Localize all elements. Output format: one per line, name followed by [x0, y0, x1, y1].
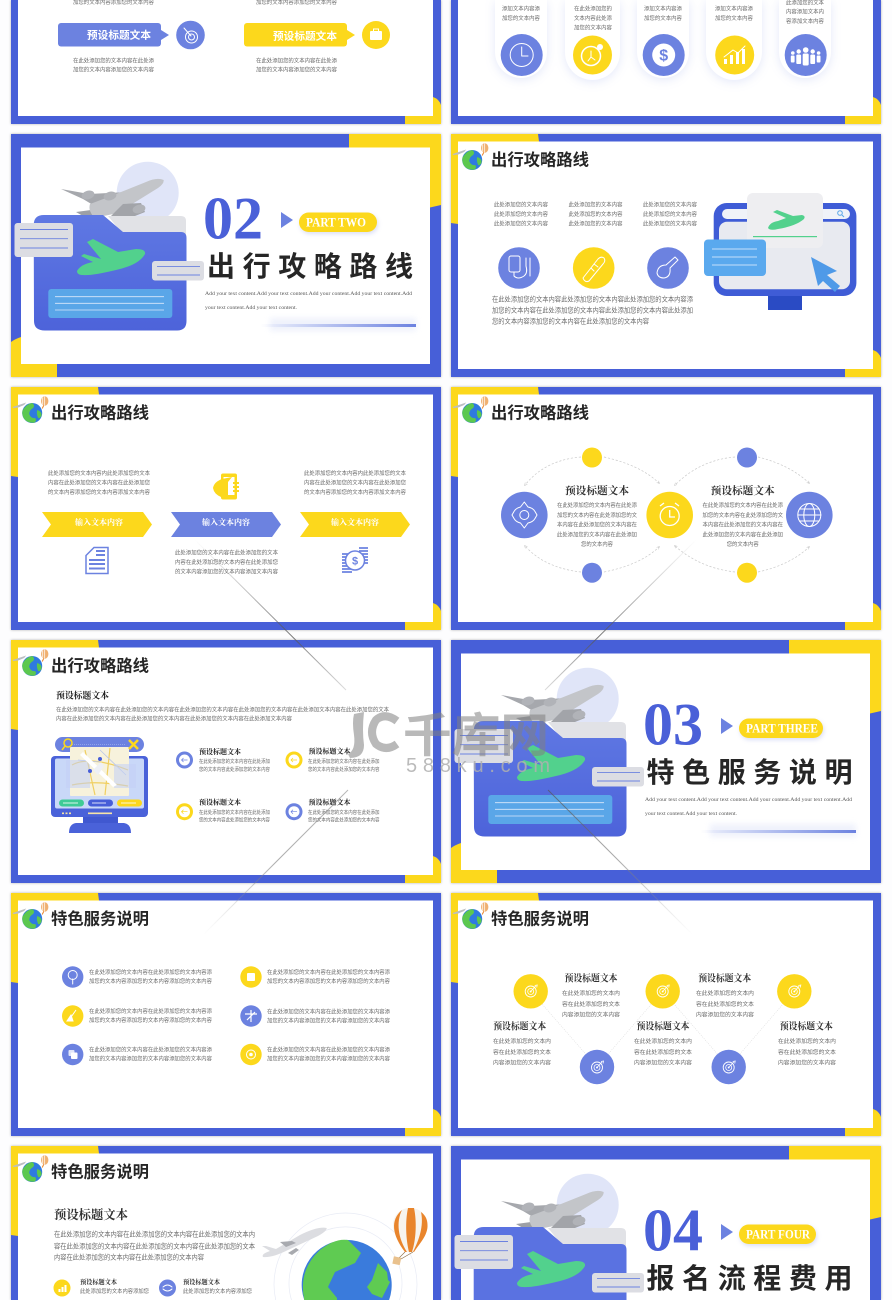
- arrow banner 2: [171, 512, 281, 537]
- arrow banner 3: [300, 512, 410, 537]
- center text: 此处添加您的文本内容在此处添加您的文本: [175, 548, 278, 556]
- lower text 3: 容在此处添加您的文本: [778, 1048, 837, 1056]
- text columns: 此处添加您的文本内容: [494, 201, 548, 209]
- text row 3: [89, 1046, 390, 1063]
- text columns: [494, 201, 697, 228]
- pill: part four: [739, 1224, 816, 1244]
- text columns: 此处添加您的文本内容: [494, 220, 548, 228]
- heading: 出行攻略路线: [51, 656, 149, 676]
- frame: [451, 1146, 881, 1300]
- text columns: 此处添加您的文本内容: [643, 220, 697, 228]
- lower text 1: [493, 1020, 552, 1066]
- illustration: folder and airplane: [14, 162, 204, 330]
- lower text 2: [634, 1020, 693, 1066]
- item: yellow: 此处添加您的文本内容添加您: [80, 1287, 149, 1295]
- item 3: 在此处添加您的文本内容在此处添加: [199, 809, 270, 816]
- text block: description: 您的文本内容添加您的文本内容在此处添加您的文本内容: [492, 316, 649, 326]
- panel: arrows slide: [11, 387, 441, 630]
- text block: descriptions: 在此处添加您的文本内容在此处添: [256, 56, 337, 64]
- text columns: 此处添加您的文本内容: [568, 220, 623, 228]
- pill: part three: [739, 718, 823, 738]
- watermark diagonal lines: [195, 540, 696, 935]
- right text: 加您的文本内容在此处添加您的文: [702, 511, 783, 519]
- center text: [175, 548, 278, 576]
- lower text 1: 预设标题文本: [493, 1020, 547, 1032]
- top text 2: 在此处添加您的文本内: [696, 989, 754, 997]
- icon: globe: [13, 1155, 48, 1186]
- orbit rings: [274, 1213, 417, 1300]
- heading: 出行攻略路线: [491, 150, 589, 170]
- left text: [48, 469, 150, 496]
- text block: description: 加您的文本内容在此处添加您的文本内容此处添加您的文本内容此处添加: [492, 306, 693, 314]
- top text 2: 预设标题文本: [698, 972, 752, 984]
- text block: english: Add your text content.Add your text content.Add your content.Add your text content.Add: [645, 797, 852, 803]
- lower text 3: 在此处添加您的文本内: [778, 1037, 836, 1045]
- label: blue pill: [58, 23, 169, 46]
- icon: dollar: $: [659, 48, 668, 64]
- top text 1: 预设标题文本: [564, 972, 618, 984]
- icon: infusion: [498, 247, 540, 289]
- panel: globe slide: [11, 1146, 441, 1300]
- frame: [451, 0, 881, 124]
- illustration: folder and airplane: [454, 668, 644, 836]
- left text: 此处添加您的文本内容内此处添加您的文本: [48, 469, 150, 477]
- icon: growth chart: [715, 36, 754, 74]
- left heading: 预设标题文本: [565, 484, 630, 497]
- icon: globe: [453, 396, 488, 427]
- text block: 内容在此处添加您的文本内容在此处添加您的文本内容在此处添加您的文本内容在此处添加文本内容: [56, 714, 292, 722]
- text row 3: 加您的文本内容添加您的文本内容添加您的文本内容: [267, 1055, 390, 1063]
- target nodes: [514, 974, 812, 1084]
- item: blue: [159, 1277, 252, 1296]
- text block: [54, 1230, 255, 1262]
- icon: coins: $: [352, 556, 358, 568]
- watermark url: 588ku.com: [406, 755, 550, 777]
- lower text 2: 在此处添加您的文本内: [634, 1037, 692, 1045]
- small dots: [582, 448, 757, 583]
- item 3: [176, 798, 270, 824]
- panel: section 02: [11, 134, 441, 377]
- left text: 在此处添加您的文本内容在此处添: [557, 501, 637, 509]
- lower text 3: [778, 1020, 837, 1066]
- text block: description: 在此处添加您的文本内容此处添加您的文本内容此处添加您的文本内容添: [492, 294, 693, 304]
- text block: 在此处添加您的文本内容在此处添加您的文本内容在此处添加您的文本内: [54, 1230, 255, 1238]
- lower text 3: 预设标题文本: [780, 1020, 833, 1032]
- text block: english: [645, 797, 852, 817]
- capsule text: 添加文本内容添: [715, 4, 753, 12]
- top text 1: 内容添加您的文本内容: [562, 1010, 621, 1018]
- icon row 2: [62, 1005, 262, 1027]
- top text 2: 容在此处添加您的文本: [696, 1000, 755, 1008]
- capsule text: 加您的文本内容: [644, 14, 682, 22]
- text block: description: [492, 294, 693, 326]
- text columns: 此处添加您的文本内容: [568, 201, 623, 209]
- top text 1: 在此处添加您的文本内: [562, 989, 620, 997]
- capsule text: 加您的文本内容: [574, 24, 612, 32]
- text row 1: 在此处添加您的文本内容在此处添加您的文本内容添: [267, 968, 390, 976]
- right text: 的文本内容添加您的文本内容添加文本内容: [304, 488, 406, 496]
- icon: globe: [13, 396, 48, 427]
- icon row 3: [62, 1044, 262, 1065]
- icon: compass: [501, 492, 548, 538]
- text row 2: 在此处添加您的文本内容在此处添加您的文本内容添: [267, 1008, 390, 1016]
- icon: triangle: [721, 718, 733, 734]
- center text: 的文本内容添加您的文本内容添加文本内容: [175, 568, 278, 576]
- text columns: 此处添加您的文本内容: [494, 210, 548, 218]
- lower text 2: 内容添加您的文本内容: [634, 1058, 693, 1066]
- label: yellow pill: [244, 23, 355, 46]
- text block: descriptions: 加您的文本内容添加您的文本内容: [256, 66, 337, 74]
- lower text 1: 在此处添加您的文本内: [493, 1037, 551, 1045]
- lower text 3: 内容添加您的文本内容: [778, 1058, 837, 1066]
- section title: 出行攻略路线: [207, 251, 413, 282]
- frame: [451, 387, 881, 630]
- top text 2: 内容添加您的文本内容: [696, 1010, 755, 1018]
- text block: [56, 705, 389, 722]
- frame: [11, 134, 441, 377]
- right text: 您的文本内容: [727, 540, 759, 548]
- icon: clock: [501, 34, 543, 76]
- item 4: 在此处添加您的文本内容在此处添加: [308, 809, 380, 816]
- right text: 在此处添加您的文本内容在此处添: [702, 501, 783, 509]
- icon: people: [785, 34, 827, 76]
- icon: briefcase: [362, 21, 390, 49]
- arrow banner 1: [42, 512, 152, 537]
- capsule text: 文本内容此处添: [574, 14, 612, 22]
- panel: zigzag slide: [451, 893, 881, 1136]
- right text: 此处添加您的文本内容内此处添加您的文本: [304, 469, 406, 477]
- right text: 本内容在此处添加您的文本内容在: [702, 521, 783, 529]
- heading: 特色服务说明: [51, 910, 149, 928]
- heading: 特色服务说明: [51, 1162, 149, 1182]
- text block: descriptions: 加您的文本内容添加您的文本内容: [73, 66, 154, 74]
- illustration: balloon: [392, 1208, 428, 1265]
- heading: 出行攻略路线: [491, 404, 589, 422]
- item: yellow: [54, 1277, 149, 1296]
- subheading: 预设标题文本: [56, 690, 109, 700]
- text row 3: 在此处添加您的文本内容在此处添加您的文本内容添: [89, 1046, 212, 1054]
- panel: icon list slide: [11, 893, 441, 1136]
- top text 1: 容在此处添加您的文本: [562, 1000, 621, 1008]
- frame: [11, 0, 441, 124]
- watermark text: 千库网: [403, 709, 549, 762]
- frame: [451, 134, 881, 377]
- item 2: 预设标题文本: [308, 747, 350, 756]
- icon: coins: [342, 548, 368, 572]
- illustration: folder and airplane: [454, 1174, 644, 1300]
- capsule text: 添加文本内容添: [502, 4, 540, 12]
- gradient bar: [260, 318, 416, 331]
- label: yellow pill: 预设标题文本: [273, 30, 338, 42]
- text row 2: [89, 1007, 390, 1024]
- icon: globe: [13, 649, 48, 680]
- frame: [11, 387, 441, 630]
- item 3: 预设标题文本: [199, 798, 241, 806]
- item 1: 在此处添加您的文本内容在此处添加: [199, 758, 270, 765]
- text row 1: [89, 968, 390, 985]
- subheading: 预设标题文本: [54, 1207, 128, 1222]
- frame: [11, 1146, 441, 1300]
- icon: bulb syringe: [647, 247, 689, 289]
- capsule cards: [495, 0, 831, 80]
- zigzag connector: [531, 991, 794, 1067]
- item 2: [286, 747, 380, 773]
- watermark: [195, 540, 696, 935]
- panel: infinity diagram slide: [451, 387, 881, 630]
- icon: triangle: [281, 212, 293, 228]
- panel: route slide with monitor: [451, 134, 881, 377]
- text columns: 此处添加您的文本内容: [568, 210, 623, 218]
- right text: 内容在此处添加您的文本内容在此处添加您: [304, 478, 406, 486]
- icon: phone in hand: [213, 474, 239, 500]
- capsule text: 加您的文本内容: [715, 14, 753, 22]
- right heading: 预设标题文本: [711, 484, 775, 497]
- panel: section 04: [451, 1146, 881, 1300]
- text block: 在此处添加您的文本内容在此处添加您的文本内容在此处添加您的文本内容在此处添加您的文本内容在此处添加文本内容在此处添加您的文本: [56, 705, 389, 713]
- item 1: 预设标题文本: [199, 747, 241, 756]
- top text 2: [696, 972, 755, 1018]
- icon: alarm clock: [646, 492, 693, 538]
- gradient bar: [700, 824, 856, 837]
- text block: top remainder: [73, 0, 337, 6]
- item 1: [176, 747, 270, 773]
- pill: part four: PART FOUR: [746, 1228, 811, 1242]
- icon: globe wireframe: [786, 492, 833, 538]
- item: yellow: 预设标题文本: [80, 1277, 117, 1286]
- pill: part two: PART TWO: [306, 216, 366, 230]
- illustration: earth: [302, 1240, 392, 1300]
- top text 1: [562, 972, 621, 1018]
- capsule text: 在此处添加您的: [574, 4, 612, 12]
- text block: english: your text content.Add your text content.: [205, 305, 298, 311]
- text row 3: 加您的文本内容添加您的文本内容添加您的文本内容: [89, 1055, 212, 1063]
- text columns: 此处添加您的文本内容: [643, 210, 697, 218]
- illustration: monitor: [704, 193, 856, 310]
- icon: globe: [453, 902, 488, 933]
- panel: section 03: [451, 640, 881, 883]
- item 4: 预设标题文本: [308, 798, 350, 806]
- panel: top right capsules slide: [451, 0, 881, 124]
- panel: map monitor slide: [11, 640, 441, 883]
- item 1: 您的文本内容此处添加您的文本内容: [199, 766, 270, 773]
- pill: part two: [299, 212, 377, 232]
- lower text 1: 内容添加您的文本内容: [493, 1058, 552, 1066]
- lower text 2: 容在此处添加您的文本: [634, 1048, 693, 1056]
- illustration: map monitor: [51, 737, 148, 833]
- text block: english: your text content.Add your text content.: [645, 811, 738, 817]
- left text: 加您的文本内容在此处添加您的文: [557, 511, 637, 519]
- lower text 1: 容在此处添加您的文本: [493, 1048, 552, 1056]
- capsule text: 容添加文本内容: [786, 17, 824, 25]
- section number: 04: [643, 1198, 703, 1264]
- text columns: 此处添加您的文本内容: [643, 201, 697, 209]
- right text: 此处添加您的文本内容在此处添加: [702, 530, 783, 538]
- text row 3: 在此处添加您的文本内容在此处添加您的文本内容添: [267, 1046, 390, 1054]
- left text: 此处添加您的文本内容在此处添加: [557, 530, 637, 538]
- dashed arrows: [525, 457, 809, 572]
- capsule text: 内容添加文本内: [786, 8, 824, 16]
- item 2: 在此处添加您的文本内容在此处添加: [308, 758, 380, 765]
- icon: dollar: [643, 34, 685, 76]
- watermark logo: [348, 712, 397, 758]
- text block: descriptions: 在此处添加您的文本内容在此处添: [73, 56, 154, 64]
- lower text 2: 预设标题文本: [636, 1020, 690, 1032]
- heading: 特色服务说明: [491, 910, 589, 928]
- left text: 的文本内容添加您的文本内容添加文本内容: [48, 488, 150, 496]
- item 4: [286, 798, 380, 824]
- text block: english: Add your text content.Add your text content.Add your content.Add your text content.Add: [205, 291, 412, 297]
- text row 1: 加您的文本内容添加您的文本内容添加您的文本内容: [267, 977, 390, 985]
- icon: document: [86, 548, 108, 574]
- left text: [557, 501, 637, 548]
- heading: 出行攻略路线: [51, 404, 149, 422]
- icon: globe: [13, 902, 48, 933]
- icon: globe: [453, 143, 488, 174]
- left text: 内容在此处添加您的文本内容在此处添加您: [48, 478, 150, 486]
- section title: 特色服务说明: [646, 757, 852, 788]
- item: blue: 此处添加您的文本内容添加您: [183, 1287, 252, 1295]
- item 2: 您的文本内容此处添加您的文本内容: [308, 766, 380, 773]
- text row 2: 加您的文本内容添加您的文本内容添加您的文本内容: [89, 1016, 212, 1024]
- capsule text: [502, 0, 824, 32]
- text row 2: 加您的文本内容添加您的文本内容添加您的文本内容: [267, 1016, 390, 1024]
- text block: english: [205, 291, 412, 311]
- frame: [11, 893, 441, 1136]
- icon row 1: [62, 966, 262, 988]
- text block: 容在此处添加您的文本内容在此处添加您的文本内容在此处添加您的文本: [54, 1242, 255, 1250]
- capsule text: 此添加您的文本: [786, 0, 824, 6]
- left text: 本内容在此处添加您的文本内容在: [557, 521, 637, 529]
- text row 1: 加您的文本内容添加您的文本内容添加您的文本内容: [89, 977, 212, 985]
- capsule text: 添加文本内容添: [644, 4, 682, 12]
- frame: [451, 893, 881, 1136]
- capsule text: 加您的文本内容: [502, 14, 540, 22]
- item: blue: 预设标题文本: [183, 1277, 220, 1286]
- left text: 您的文本内容: [581, 540, 613, 548]
- pill: part three: PART THREE: [746, 722, 818, 736]
- frame: [11, 640, 441, 883]
- icon: gear runner: [573, 36, 612, 74]
- right text: [702, 501, 783, 548]
- panel: top left content slide: [11, 0, 441, 124]
- arrow banner 2: 输入文本内容: [202, 517, 250, 527]
- text block: descriptions: [73, 56, 337, 74]
- icon: thermometer: [573, 247, 614, 289]
- text row 2: 在此处添加您的文本内容在此处添加您的文本内容添: [89, 1007, 212, 1015]
- arrow banner 1: 输入文本内容: [75, 517, 123, 527]
- icon: dart target: [176, 21, 205, 49]
- section number: 02: [203, 186, 263, 252]
- section title: 报名流程费用: [646, 1263, 852, 1294]
- text row 1: 在此处添加您的文本内容在此处添加您的文本内容添: [89, 968, 212, 976]
- frame: [451, 640, 881, 883]
- center text: 内容在此处添加您的文本内容在此处添加您: [175, 558, 278, 566]
- section number: 03: [643, 692, 703, 758]
- illustration: airplane: [262, 1228, 327, 1257]
- item 3: 您的文本内容此处添加您的文本内容: [199, 817, 270, 824]
- arrow banner 3: 输入文本内容: [331, 517, 379, 527]
- text block: 内容在此处添加您的文本内容在此处添加您的文本内容: [54, 1252, 204, 1262]
- item 4: 您的文本内容此处添加您的文本内容: [308, 817, 380, 824]
- right text: [304, 469, 406, 496]
- icon: triangle: [721, 1224, 733, 1240]
- label: blue pill: 预设标题文本: [87, 28, 152, 42]
